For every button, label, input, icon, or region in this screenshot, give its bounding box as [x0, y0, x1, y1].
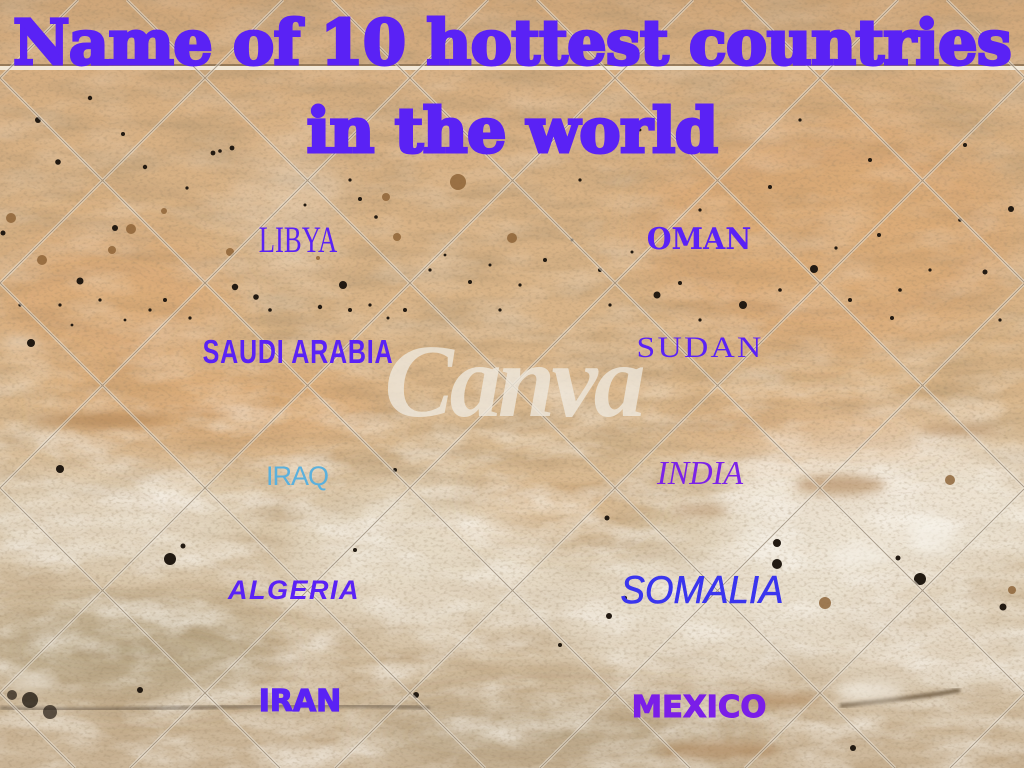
country: Oman: OMAN [647, 222, 751, 257]
country: Somalia: SOMALIA [621, 569, 783, 612]
title: Name of 10 hottest countries [13, 6, 1011, 79]
watermark: Canva logo: Canva [384, 324, 642, 439]
country: Mexico: MEXICO [632, 690, 766, 725]
title [13, 6, 1011, 167]
country: India: INDIA [657, 455, 743, 492]
country: Iran: IRAN [259, 684, 341, 719]
country: Saudi Arabia: SAUDI ARABIA [203, 333, 393, 370]
country: Iraq: IRAQ [266, 461, 328, 491]
country: Sudan: SUDAN [637, 331, 763, 364]
country: Algeria: ALGERIA [228, 575, 360, 605]
title: in the world [307, 94, 717, 167]
country: Libya: LIBYA [259, 220, 337, 261]
